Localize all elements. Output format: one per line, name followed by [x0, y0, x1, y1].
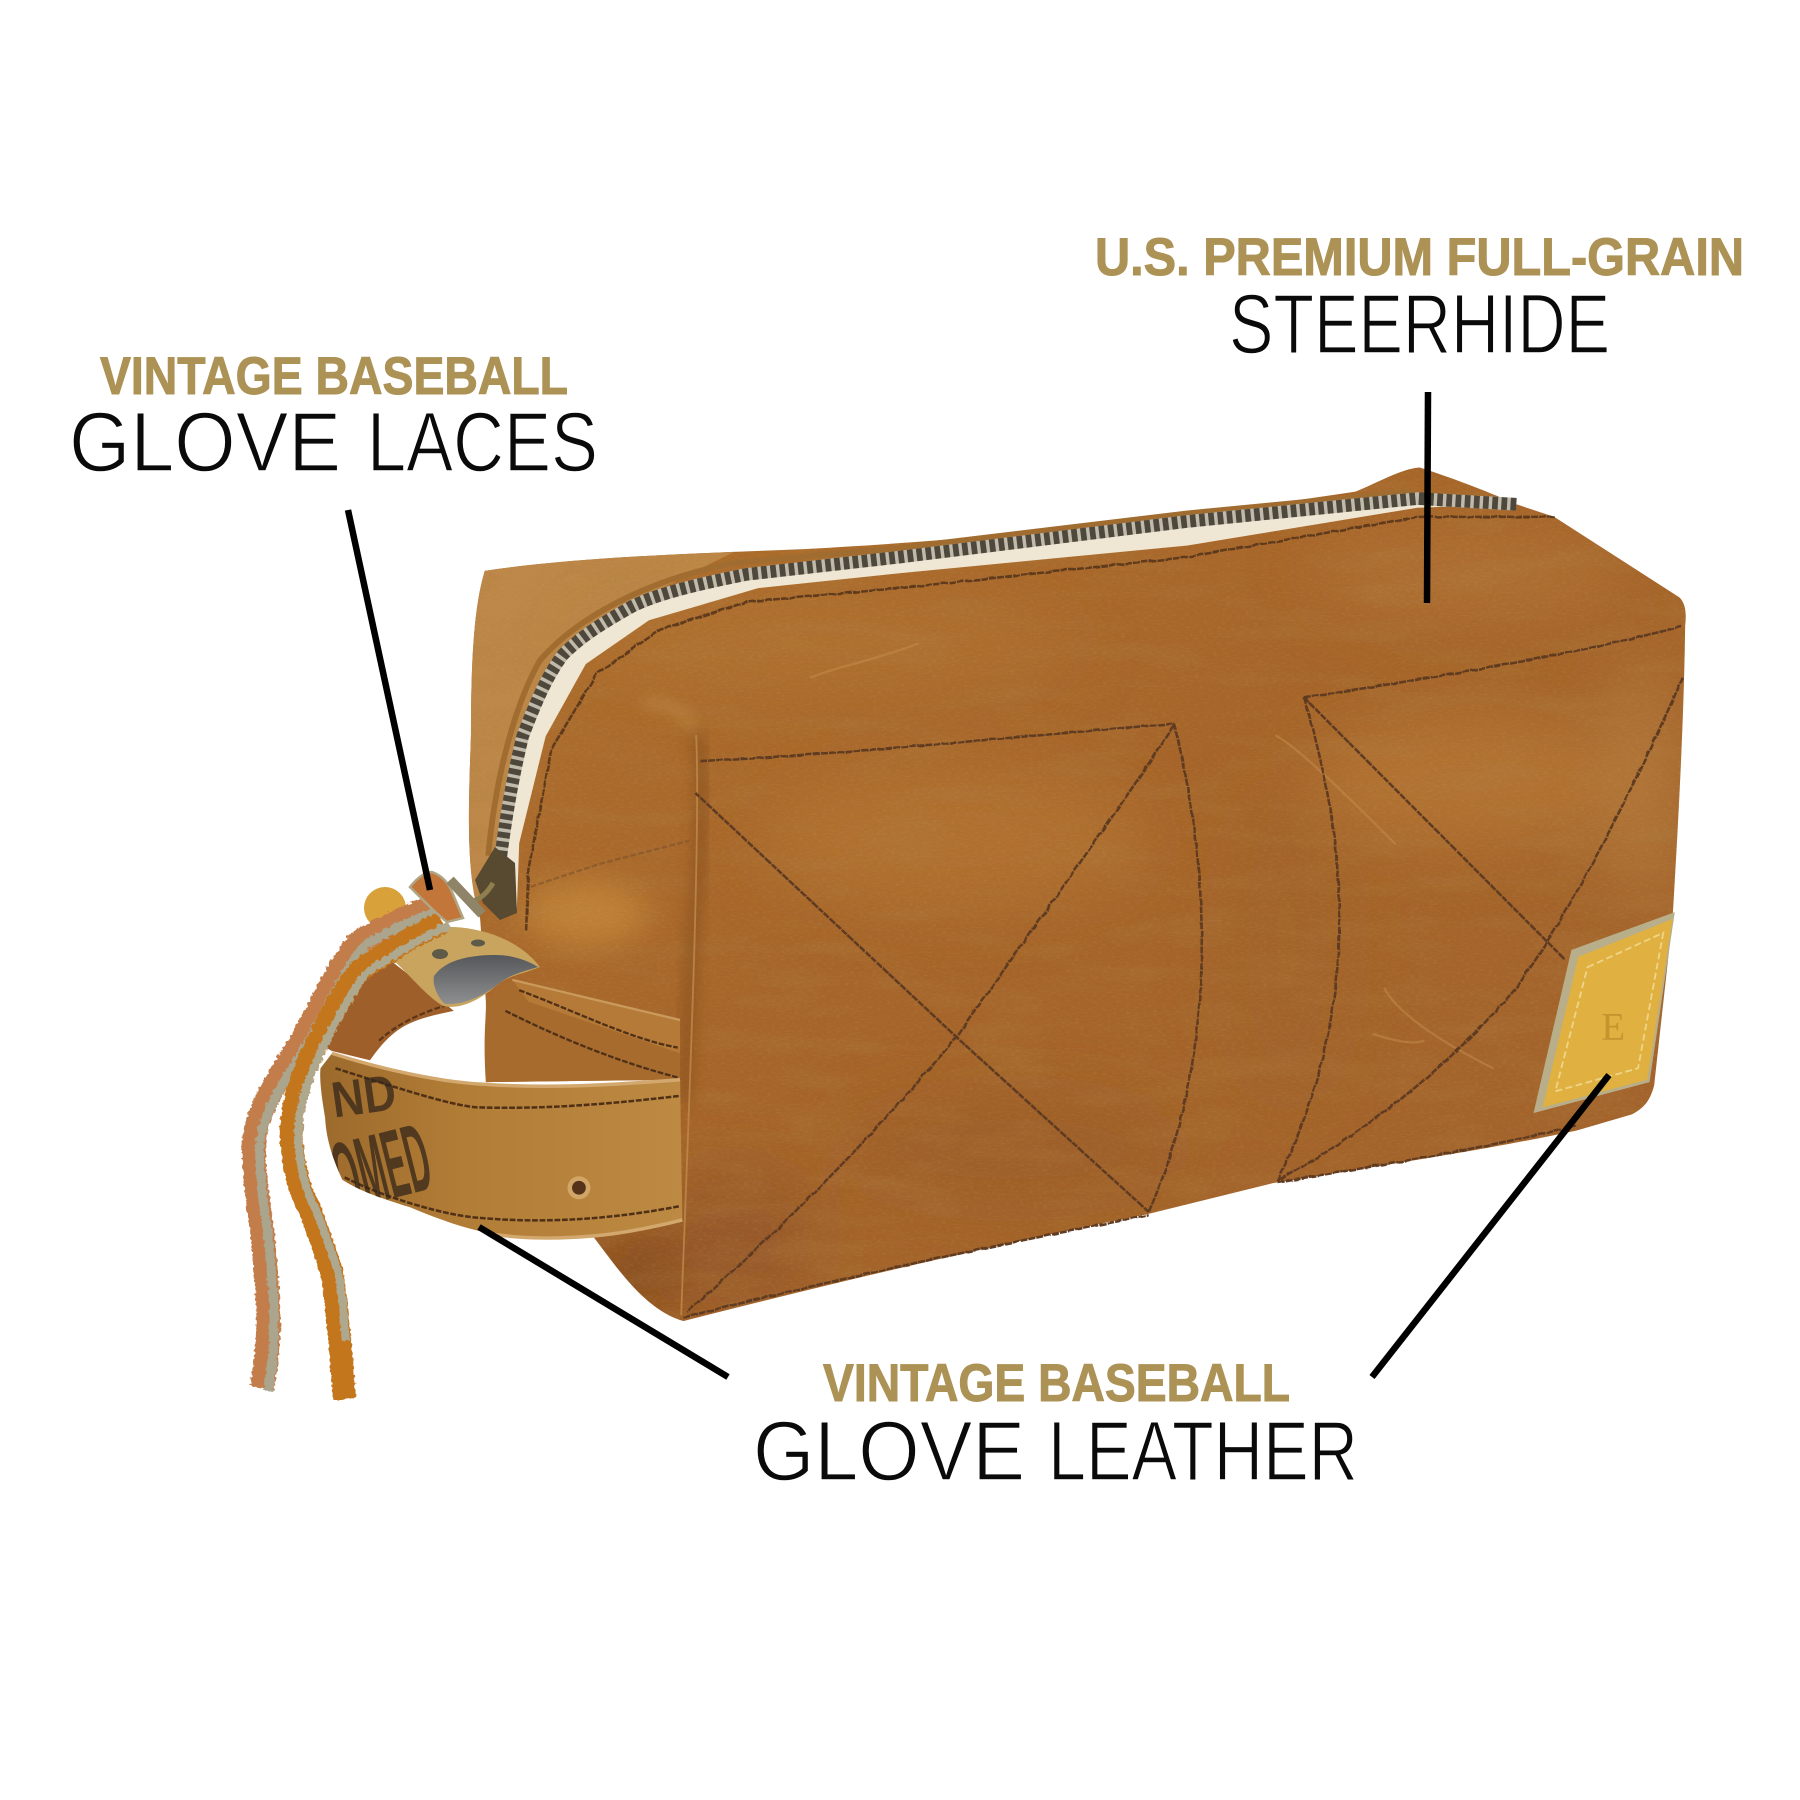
patch monogram: E — [1601, 1006, 1625, 1049]
panel stitching: left X panel — [683, 724, 1202, 1318]
faint end stitch — [531, 841, 689, 887]
handle back loop — [307, 961, 454, 1060]
yellow leather patch — [1534, 912, 1675, 1113]
callout: steerhide — [1095, 228, 1744, 603]
front corner fold shadow — [685, 726, 701, 1103]
label: glove leather — [753, 1404, 1358, 1498]
left end highlight — [523, 881, 649, 945]
product photo: leather dopp bag — [307, 459, 1700, 1332]
heading: vintage baseball: VINTAGE BASEBALL — [100, 347, 568, 406]
glove tab on zipper pull — [393, 927, 540, 1007]
callout: glove leather — [479, 1075, 1609, 1498]
lace knot — [410, 872, 482, 922]
lace end ball — [364, 887, 406, 929]
back panel, lighter leather — [459, 551, 735, 907]
zipper tape — [500, 499, 1516, 907]
pointer line: handle — [479, 1227, 728, 1377]
panel stitching: right X panel — [1277, 626, 1683, 1182]
zipper outer flap edge — [488, 492, 1413, 856]
heading: vintage baseball: VINTAGE BASEBALL — [823, 1354, 1290, 1413]
callout: glove laces — [69, 347, 598, 890]
label: glove laces: LACES — [367, 395, 598, 489]
label: glove leather: LEATHER — [1048, 1404, 1358, 1498]
handle stamp lettering: ND — [328, 1063, 400, 1129]
zipper pull, brass — [470, 847, 517, 920]
pointer line: patch — [1372, 1075, 1609, 1377]
label: glove leather: GLOVE — [753, 1404, 1025, 1498]
handle stamp lettering — [332, 1076, 430, 1200]
handle base attached to bag — [486, 980, 680, 1082]
pointer line: laces — [348, 510, 430, 890]
bag body — [459, 459, 1700, 1332]
handle eyelet — [567, 1176, 590, 1199]
pointer line: steerhide — [1427, 392, 1428, 603]
zipper teeth — [501, 499, 1516, 856]
light scuff marks — [810, 643, 1493, 1068]
heading: U.S. premium full-grain: U.S. PREMIUM FULL-GRAIN — [1095, 228, 1744, 287]
label: glove laces: GLOVE — [69, 395, 341, 489]
label: steerhide: STEERHIDE — [1229, 277, 1610, 371]
stitching below zipper — [526, 517, 1554, 930]
label: glove laces — [69, 395, 598, 489]
handle band, glove leather: OMED — [322, 1104, 441, 1231]
glove lace strands — [254, 907, 449, 1399]
leather shading — [574, 540, 1671, 1321]
